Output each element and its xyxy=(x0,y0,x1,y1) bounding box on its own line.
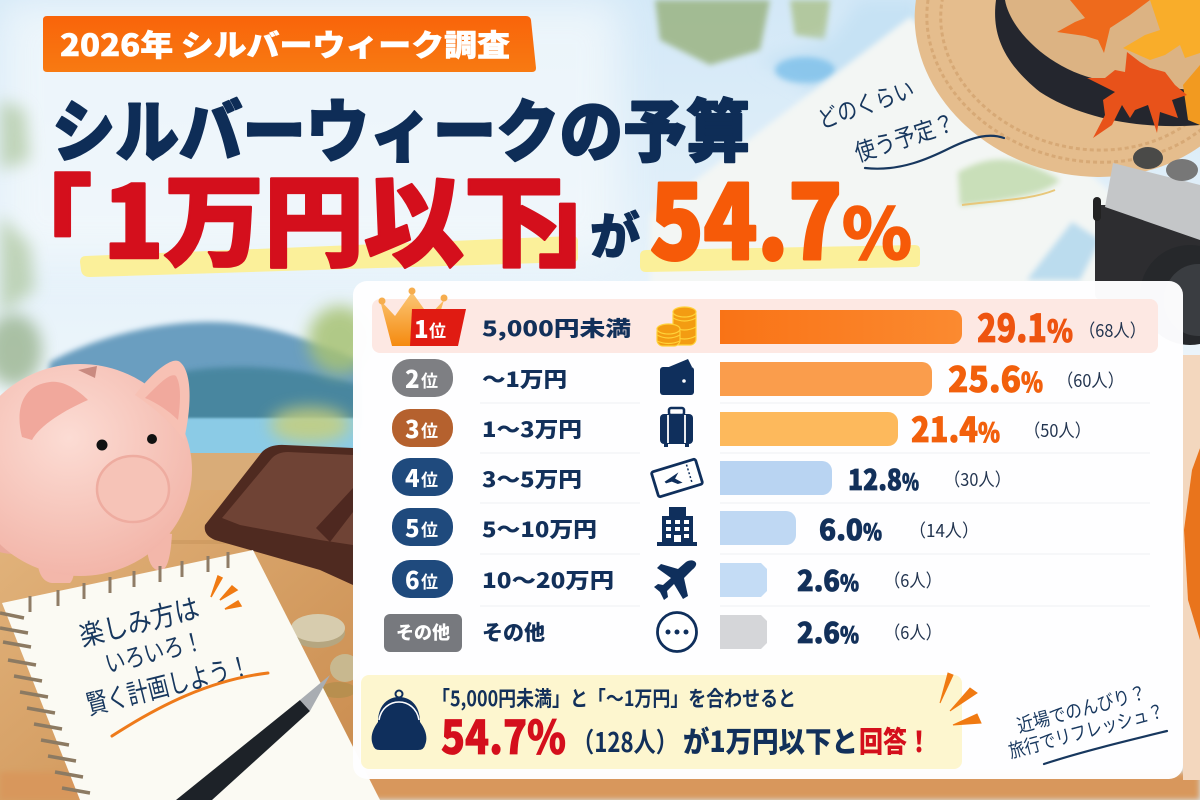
row 5 bar xyxy=(720,511,796,545)
map xyxy=(650,17,1200,320)
handwriting: notebook message: 賢く計画しよう！ xyxy=(82,644,254,723)
rank 2 badge xyxy=(392,359,453,397)
other badge xyxy=(384,614,462,652)
rank 1 badge with crown: 1 xyxy=(414,310,429,345)
callout answer: 回答！ xyxy=(859,719,931,761)
rank 4 badge: 4 xyxy=(405,459,420,494)
icon: suitcase xyxy=(660,408,693,447)
straw hat xyxy=(881,0,1200,215)
handwriting: notebook message xyxy=(65,578,254,723)
notebook xyxy=(0,550,380,800)
row 6 percent: 2.6 xyxy=(797,560,840,600)
row 2 label: 〜1万円 xyxy=(482,364,567,394)
callout sentence: 「5,000円未満」と「〜1万円」を合わせると xyxy=(432,683,796,713)
rank 6 badge xyxy=(392,560,453,598)
rank 5 badge xyxy=(392,508,453,546)
icon: ticket xyxy=(651,459,703,497)
rank 3 badge: 位 xyxy=(421,417,438,442)
rank 4 badge xyxy=(392,458,453,496)
notebook underline xyxy=(112,673,268,736)
other percent: % xyxy=(840,618,859,650)
headline percentage: 54.7 xyxy=(650,142,842,289)
row 5 label: 5〜10万円 xyxy=(482,514,597,544)
coins xyxy=(291,614,360,698)
rank 5 badge: 位 xyxy=(421,516,438,541)
handwritten question: 使う予定？ xyxy=(849,103,959,168)
other bar xyxy=(720,615,767,649)
other label: その他 xyxy=(482,617,545,647)
notebook burst xyxy=(211,576,241,609)
rank 4 badge: 位 xyxy=(421,466,438,491)
row 1 highlight xyxy=(372,299,1158,353)
icon: speech dots xyxy=(658,612,696,652)
row 6 percent: % xyxy=(840,566,859,598)
panel: ranking xyxy=(353,281,1183,779)
title line 2 connector: が xyxy=(590,197,640,269)
row 6 label: 10〜20万円 xyxy=(482,565,614,595)
handwriting: notebook message: 楽しみ方は xyxy=(75,587,203,655)
camera xyxy=(1093,147,1200,345)
headline percent sign: % xyxy=(842,179,912,280)
rank 6 badge: 位 xyxy=(421,568,438,593)
row 4 label: 3〜5万円 xyxy=(482,464,582,494)
handwritten question: どのくらい xyxy=(812,70,918,135)
right edge xyxy=(1183,355,1200,780)
title line 1: シルバーウィークの予算 xyxy=(52,77,750,176)
handwritten question xyxy=(812,70,1004,169)
callout: summary xyxy=(361,675,962,769)
maple leaves xyxy=(1057,0,1200,138)
row 1 percent: % xyxy=(1047,307,1073,351)
other count: （6人） xyxy=(884,619,942,645)
row 5 percent xyxy=(819,509,882,549)
callout count: （128人） xyxy=(572,721,678,760)
handwritten note: 旅行でリフレッシュ？ xyxy=(1005,696,1167,764)
piggy bank xyxy=(0,361,192,583)
row 3 percent: 21.4 xyxy=(911,403,978,452)
row 1 label: 5,000円未満 xyxy=(482,313,631,343)
survey tag: 2026年 シルバーウィーク調査 xyxy=(60,21,510,65)
row 3 percent: % xyxy=(978,413,1000,450)
row 4 percent: 12.8 xyxy=(848,459,902,499)
row 5 percent: 6.0 xyxy=(819,509,863,549)
row 3 count: （50人） xyxy=(1024,417,1091,443)
rank 2 badge: 2 xyxy=(405,360,420,395)
row 1 count: （68人） xyxy=(1079,317,1146,343)
row 3 bar xyxy=(720,412,898,446)
icon: airplane xyxy=(654,560,696,600)
row 4 percent: % xyxy=(902,465,919,497)
row 5 percent: % xyxy=(863,515,882,547)
burst marks xyxy=(940,673,981,725)
row 2 bar xyxy=(720,362,932,396)
row 2 percent: % xyxy=(1021,361,1043,400)
survey tag xyxy=(43,16,536,72)
rank 5 badge: 5 xyxy=(405,509,420,544)
handwritten note: 近場でのんびり？ xyxy=(1014,678,1149,739)
row 4 count: （30人） xyxy=(944,466,1011,492)
title line 2 main phrase: 」 xyxy=(538,142,638,287)
row 5 count: （14人） xyxy=(909,517,979,543)
callout conclusion: が1万円以下と xyxy=(683,719,858,761)
highlighter stripes xyxy=(80,236,920,277)
rank 1 badge with crown xyxy=(378,288,466,346)
rank 2 badge: 位 xyxy=(421,367,438,392)
row 1 bar xyxy=(720,310,962,344)
row 2 count: （60人） xyxy=(1057,367,1124,393)
rank 6 badge: 6 xyxy=(405,561,420,596)
icon: coins xyxy=(657,307,696,346)
row 3 label: 1〜3万円 xyxy=(482,414,582,444)
row 6 count: （6人） xyxy=(884,567,942,593)
rank 3 badge xyxy=(392,409,453,447)
icon: building xyxy=(657,507,697,546)
icon: wallet xyxy=(660,359,694,395)
other percent: 2.6 xyxy=(797,612,840,652)
rank 1 badge with crown: 位 xyxy=(429,317,446,342)
rank 3 badge: 3 xyxy=(405,410,420,445)
pen xyxy=(176,675,330,800)
title xyxy=(0,77,920,289)
row 6 bar xyxy=(720,563,767,597)
row 1 percent: 29.1 xyxy=(977,298,1047,353)
icon: coin purse xyxy=(372,690,426,750)
row 2 percent: 25.6 xyxy=(948,352,1021,403)
row 4 bar xyxy=(720,461,832,495)
callout percent: 54.7% xyxy=(441,702,566,768)
other badge: その他 xyxy=(396,619,450,645)
handwriting: notebook message: いろいろ！ xyxy=(101,622,207,681)
title line 2 main phrase: 1万円以下 xyxy=(103,142,564,287)
wallet xyxy=(205,445,353,585)
